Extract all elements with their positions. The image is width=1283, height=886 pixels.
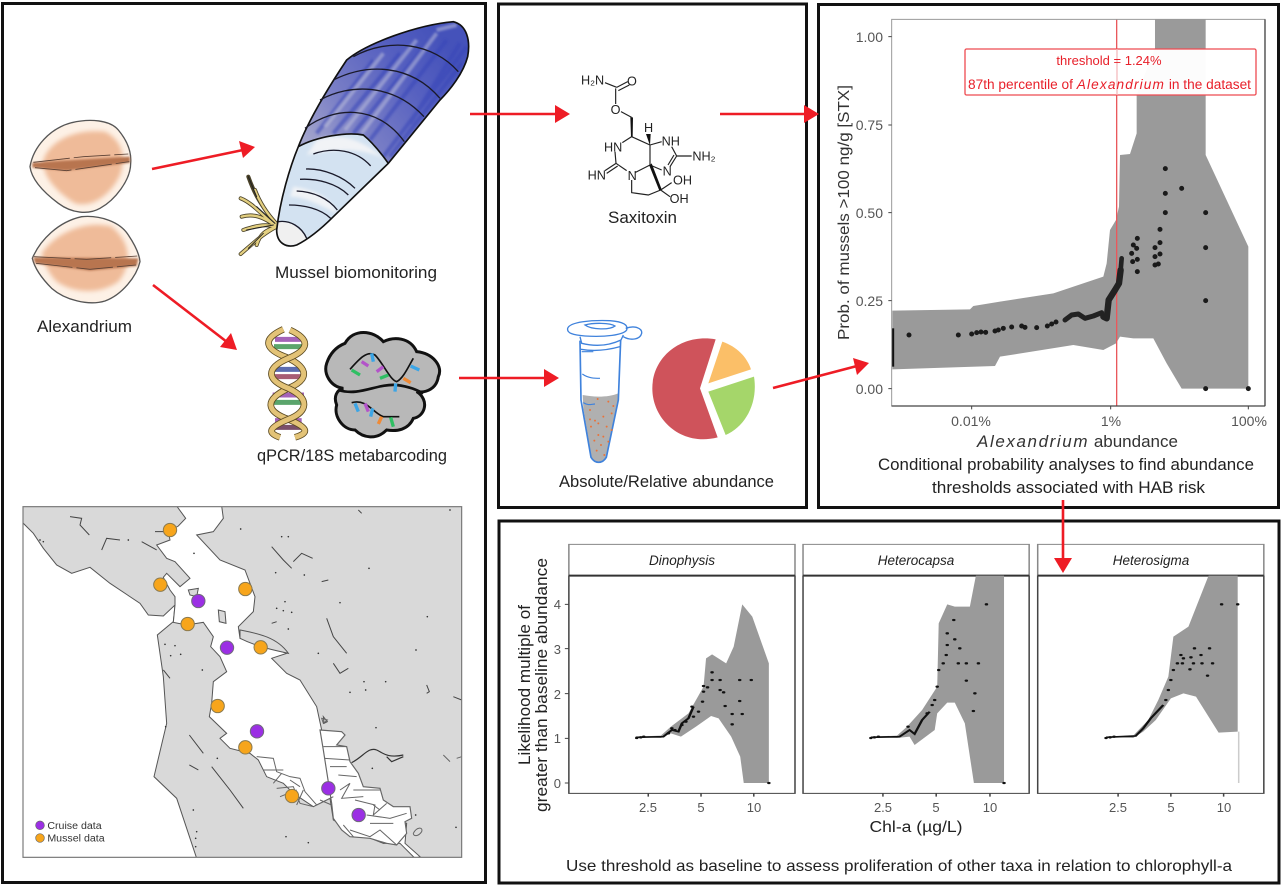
- x axis ticks: 0.01%: [951, 413, 991, 429]
- cruise stations: [192, 594, 365, 822]
- facet x ticks: 2.5: [1109, 800, 1127, 815]
- facet x ticks: 2.5: [874, 800, 892, 815]
- arrow: mussel to saxitoxin: [470, 105, 570, 123]
- arrow: cells to qPCR: [153, 285, 237, 350]
- facet x ticks: 5: [1167, 800, 1175, 815]
- panel: conditional probability chart: [818, 4, 1278, 508]
- icon: DNA fragments in cloud: [326, 332, 440, 437]
- caption: conditional probability: Conditional probability analyses to find abundance: [878, 456, 1254, 474]
- y axis ticks: 0.00: [856, 381, 883, 397]
- facet strip labels: Dinophysis: [649, 553, 715, 568]
- facet y ticks: 2: [554, 687, 561, 702]
- x axis title: Alexandrium abundance: [976, 432, 1178, 451]
- caption: conditional probability: [878, 456, 1254, 497]
- arrow: chart to facets: [1054, 500, 1072, 573]
- mussel stations: [154, 523, 299, 803]
- facet x axis title: Chl-a (µg/L): [870, 819, 962, 836]
- facet y axis title: greater than baseline abundance: [533, 558, 551, 812]
- icon: saxitoxin structure: O: [627, 74, 637, 88]
- facet: Heterocapsa: [803, 544, 1029, 793]
- facet y axis title: Likelihood multiple of: [516, 605, 534, 765]
- facet x ticks: 10: [747, 800, 761, 815]
- facet: Heterosigma: [1038, 544, 1264, 793]
- arrow: abundance to chart: [773, 358, 869, 388]
- icon: saxitoxin structure: N: [663, 165, 672, 179]
- y axis title: Prob. of mussels >100 ng/g [STX]: [836, 85, 853, 340]
- icon: pie chart: [652, 338, 755, 439]
- icon: saxitoxin structure: NH₂: [692, 150, 716, 164]
- south bay marshes: [257, 718, 462, 845]
- facet y axis title: [516, 558, 551, 812]
- panel: toxin and abundance: [498, 4, 806, 508]
- data points: [893, 169, 1248, 389]
- label: Mussel biomonitoring: Mussel biomonitoring: [275, 264, 437, 282]
- x axis ticks: 1%: [1101, 413, 1121, 429]
- icon: saxitoxin structure: [581, 74, 716, 206]
- water: Pacific ocean: [20, 520, 197, 858]
- icon: saxitoxin structure: HN: [604, 140, 622, 154]
- threshold line: [1115, 19, 1119, 406]
- icon: saxitoxin structure: NH: [662, 134, 680, 148]
- icon: saxitoxin structure: OH: [673, 173, 692, 187]
- arrow: qPCR to abundance: [459, 369, 559, 387]
- y axis ticks: [856, 29, 883, 397]
- caption: conditional probability: thresholds associated with HAB risk: [932, 479, 1206, 497]
- facet strip labels: [649, 553, 1190, 568]
- plot axes: [892, 19, 1265, 406]
- icon: DNA helix: [269, 329, 305, 437]
- threshold callout: threshold = 1.24%: [1056, 53, 1162, 68]
- facet x ticks: 10: [1217, 800, 1231, 815]
- facet y ticks: 4: [554, 597, 561, 612]
- facet x ticks: 5: [932, 800, 940, 815]
- label: qPCR/18S metabarcoding: qPCR/18S metabarcoding: [257, 447, 447, 465]
- facet y ticks: [554, 597, 561, 791]
- icon: saxitoxin structure: N: [628, 169, 637, 183]
- label: Saxitoxin: Saxitoxin: [608, 209, 677, 227]
- panel: taxa facet charts: [499, 521, 1279, 883]
- arrow: cells to mussel: [152, 141, 255, 169]
- facet x ticks: 2.5: [639, 800, 657, 815]
- chart: taxa facets: [516, 544, 1264, 836]
- chart: probability vs Alexandrium abundance: [836, 19, 1267, 451]
- facet y ticks: 1: [554, 731, 561, 746]
- arrow: saxitoxin to chart: [720, 105, 819, 123]
- facet strip labels: Heterosigma: [1113, 553, 1190, 568]
- label: Absolute/Relative abundance: Absolute/Relative abundance: [559, 473, 774, 491]
- confidence band: [892, 19, 1248, 389]
- x axis ticks: 100%: [1231, 413, 1267, 429]
- facet x ticks: 10: [983, 800, 997, 815]
- icon: saxitoxin structure: H₂N: [581, 74, 604, 88]
- facet y ticks: 3: [554, 642, 561, 657]
- threshold callout: [965, 49, 1256, 95]
- threshold callout: 87th percentile of Alexandrium in the dataset: [968, 77, 1251, 92]
- y axis ticks: 0.25: [856, 293, 883, 309]
- y axis ticks: 0.50: [856, 205, 883, 221]
- icon: Alexandrium cells: [30, 120, 140, 303]
- map legend: [36, 821, 105, 845]
- icon: saxitoxin structure: O: [611, 103, 621, 117]
- map legend: Mussel data: [47, 834, 105, 845]
- y axis ticks: 0.75: [856, 117, 883, 133]
- panel: left workflow and map: [2, 4, 486, 882]
- icon: mussel: [241, 22, 469, 254]
- label: Alexandrium: Alexandrium: [37, 318, 132, 336]
- water: bay: [157, 506, 420, 858]
- caption: baseline proliferation: Use threshold as baseline to assess proliferation of other taxa in relation to chlorophyll-a: [566, 858, 1232, 875]
- icon: saxitoxin structure: HN: [588, 168, 606, 182]
- icon: saxitoxin structure: OH: [670, 192, 689, 206]
- icon: sample tube: [568, 321, 642, 463]
- x axis ticks: [951, 413, 1267, 429]
- map legend: Cruise data: [47, 821, 102, 832]
- facet x ticks: [639, 800, 1231, 815]
- facet: Dinophysis: [569, 544, 795, 793]
- y axis ticks: 1.00: [856, 29, 883, 45]
- facet strip labels: Heterocapsa: [878, 553, 955, 568]
- facet x ticks: 5: [697, 800, 705, 815]
- facet y ticks: 0: [554, 776, 561, 791]
- map: San Francisco Bay stations: [20, 506, 462, 858]
- icon: saxitoxin structure: H: [644, 121, 653, 135]
